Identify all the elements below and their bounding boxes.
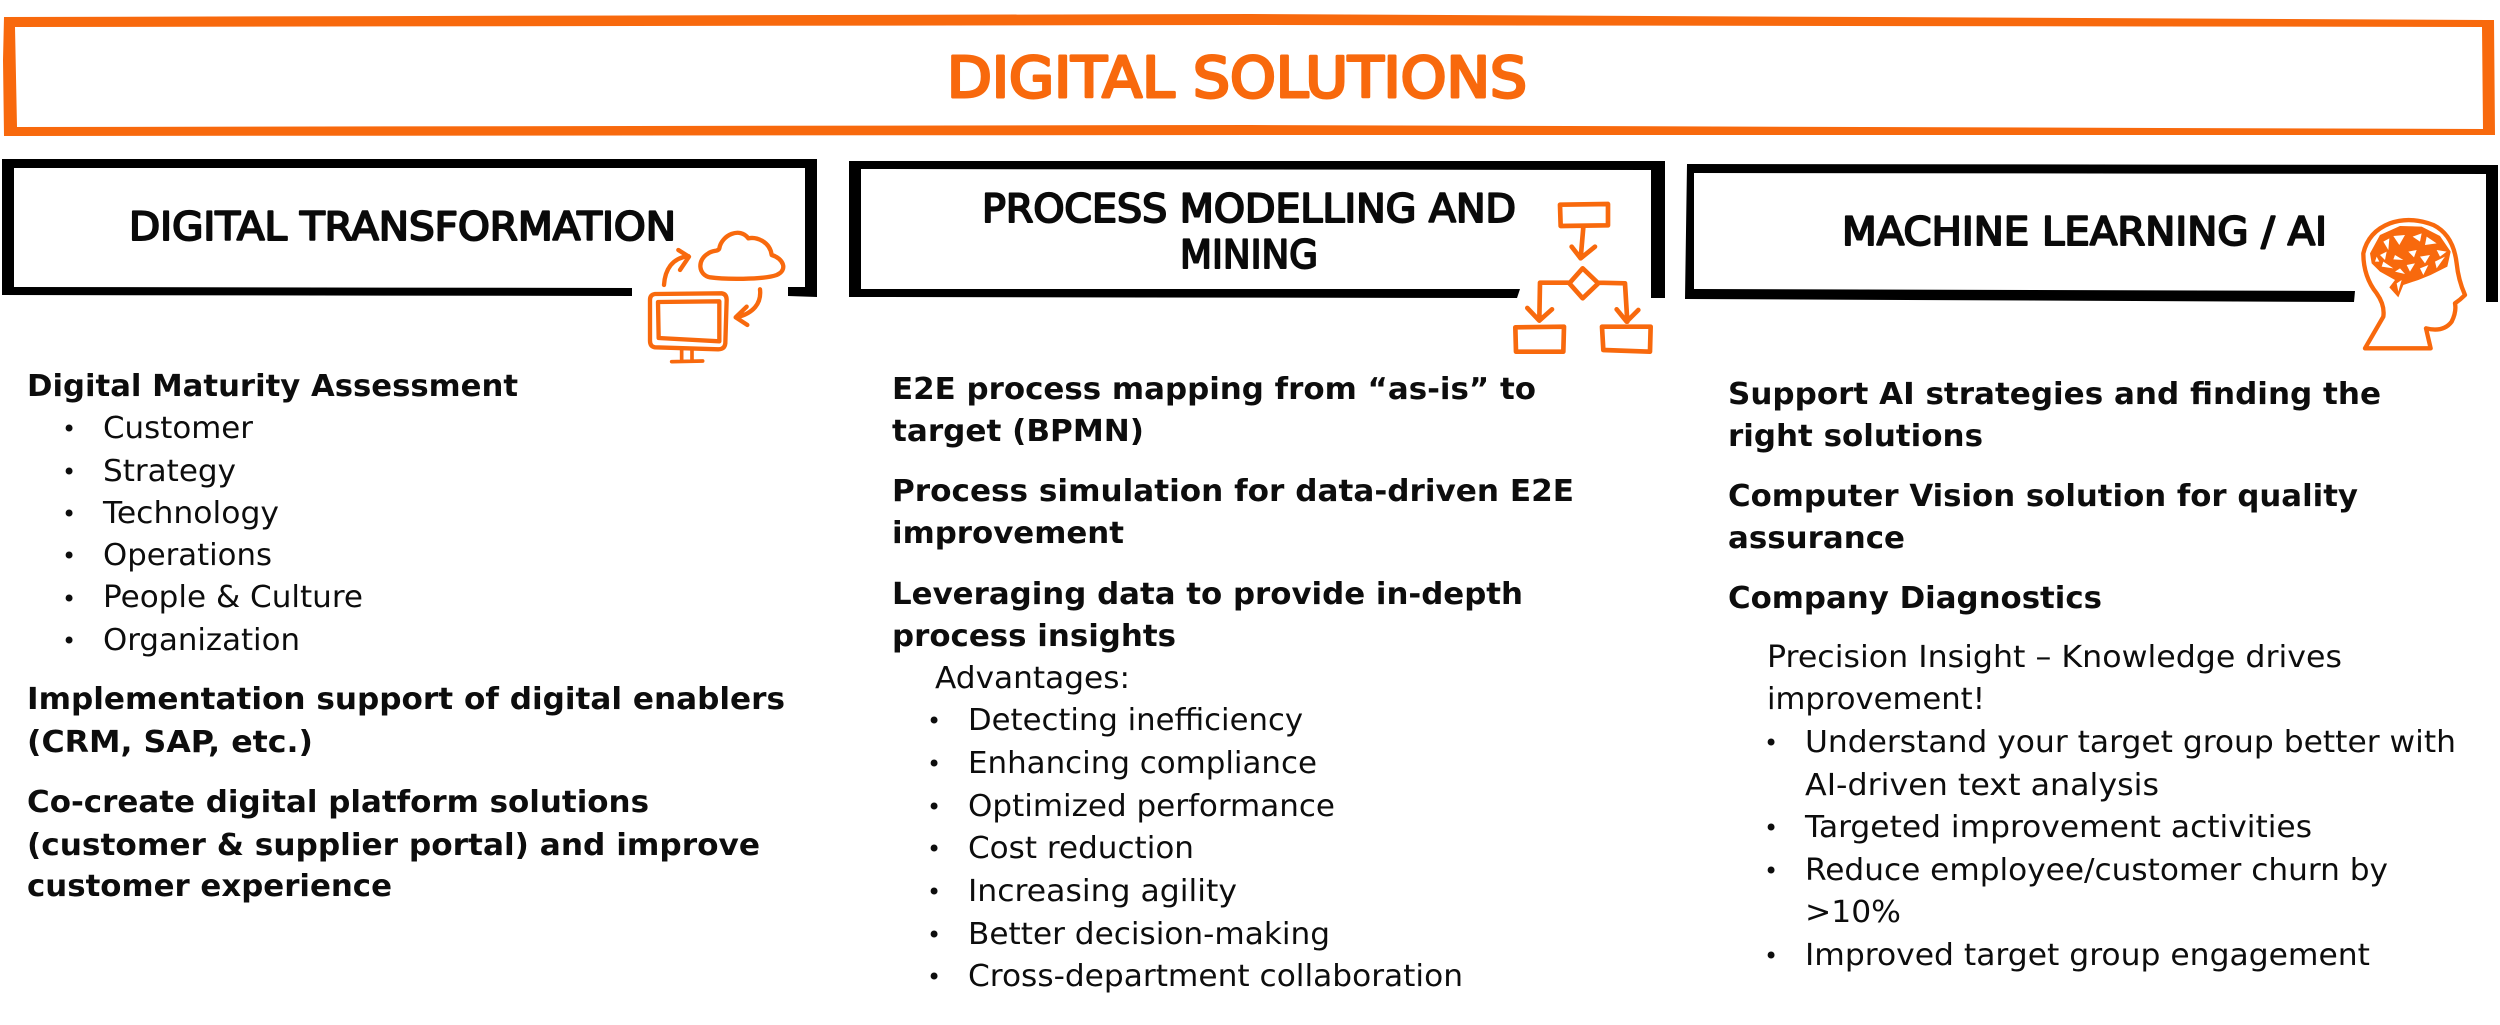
body text: process modelling: • bbox=[927, 878, 941, 906]
panel: machine learning / AI bbox=[1685, 164, 2498, 973]
body text: digital transformation: (customer & supplier portal) and improve bbox=[27, 828, 760, 863]
body text: machine learning: • bbox=[1764, 942, 1778, 970]
body text: process modelling: • bbox=[927, 921, 941, 949]
header frame bbox=[1685, 164, 2498, 302]
body text: digital transformation: Implementation support of digital enablers bbox=[27, 682, 785, 717]
title text: DIGITAL SOLUTIONS bbox=[947, 46, 1527, 111]
body text: digital transformation: Co-create digital platform solutions bbox=[27, 785, 649, 820]
body text: machine learning: Understand your target group better with bbox=[1805, 725, 2456, 760]
body text: process modelling: Better decision-making bbox=[968, 917, 1330, 952]
body text: machine learning: Computer Vision solution for quality bbox=[1728, 479, 2358, 514]
body text: process modelling: • bbox=[927, 750, 941, 778]
body text: machine learning: • bbox=[1764, 857, 1778, 885]
body text: machine learning: Precision Insight – Knowledge drives bbox=[1767, 640, 2342, 675]
body text: process modelling: Detecting inefficiency bbox=[968, 703, 1303, 738]
body text: process modelling: Cross-department collaboration bbox=[968, 959, 1463, 994]
body text: digital transformation bbox=[27, 369, 785, 904]
title frame bbox=[3, 14, 2495, 136]
header frame bbox=[849, 161, 1665, 298]
panel: process modelling and mining bbox=[849, 161, 1665, 994]
panel: process modelling and mining: MINING bbox=[1180, 233, 1318, 278]
body text: machine learning: assurance bbox=[1728, 521, 1905, 556]
body text: process modelling: Cost reduction bbox=[968, 831, 1194, 866]
icon: head with brain network bbox=[2363, 220, 2465, 348]
body text: digital transformation: Technology bbox=[102, 496, 279, 531]
header text: MACHINE LEARNING / AI bbox=[1842, 210, 2327, 255]
body text: process modelling: Advantages: bbox=[935, 661, 1130, 696]
body text: digital transformation: (CRM, SAP, etc.) bbox=[27, 725, 313, 760]
body text: digital transformation: • bbox=[62, 627, 76, 655]
body text: machine learning: improvement! bbox=[1767, 682, 1985, 717]
body text: process modelling: process insights bbox=[892, 619, 1176, 654]
icon: monitor and cloud bbox=[650, 233, 783, 362]
panel: digital transformation bbox=[2, 159, 817, 904]
body text: digital transformation: Organization bbox=[103, 623, 300, 658]
body text: machine learning: Support AI strategies and finding the bbox=[1728, 377, 2381, 412]
body text: machine learning: Reduce employee/customer churn by bbox=[1805, 853, 2388, 888]
body text: process modelling: target (BPMN) bbox=[892, 414, 1144, 449]
body text: process modelling: Process simulation for data-driven E2E bbox=[892, 474, 1574, 509]
header text: DIGITAL TRANSFORMATION bbox=[129, 205, 676, 250]
header text: PROCESS MODELLING AND bbox=[982, 187, 1516, 232]
body text: digital transformation: customer experience bbox=[27, 869, 392, 904]
body text: digital transformation: People & Culture bbox=[103, 580, 363, 615]
body text: machine learning: AI-driven text analysis bbox=[1805, 768, 2159, 803]
body text: digital transformation: • bbox=[62, 458, 76, 486]
body text: process modelling: • bbox=[927, 707, 941, 735]
body text: process modelling: Enhancing compliance bbox=[968, 746, 1317, 781]
body text: machine learning: Targeted improvement activities bbox=[1804, 810, 2312, 845]
body text: machine learning: Company Diagnostics bbox=[1728, 581, 2102, 616]
body text: machine learning bbox=[1728, 377, 2456, 973]
header frame bbox=[2, 159, 817, 297]
body text: digital transformation: Strategy bbox=[103, 454, 236, 489]
body text: process modelling bbox=[892, 372, 1574, 994]
icon: flowchart bbox=[1515, 204, 1651, 352]
body text: machine learning: • bbox=[1764, 729, 1778, 757]
body text: process modelling: Increasing agility bbox=[968, 874, 1237, 909]
body text: process modelling: E2E process mapping from “as-is” to bbox=[892, 372, 1536, 407]
body text: digital transformation: • bbox=[62, 500, 76, 528]
body text: digital transformation: • bbox=[62, 585, 76, 613]
body text: machine learning: Improved target group engagement bbox=[1805, 938, 2370, 973]
body text: digital transformation: • bbox=[62, 542, 76, 570]
body text: process modelling: Optimized performance bbox=[968, 789, 1335, 824]
body text: digital transformation: Digital Maturity Assessment bbox=[27, 369, 518, 404]
body text: digital transformation: • bbox=[62, 415, 76, 443]
body text: process modelling: Leveraging data to provide in-depth bbox=[892, 577, 1523, 612]
body text: process modelling: • bbox=[927, 793, 941, 821]
body text: process modelling: • bbox=[927, 963, 941, 991]
body text: machine learning: >10% bbox=[1805, 895, 1901, 930]
body text: digital transformation: Customer bbox=[103, 411, 254, 446]
body text: process modelling: improvement bbox=[892, 516, 1124, 551]
body text: process modelling: • bbox=[927, 835, 941, 863]
body text: machine learning: right solutions bbox=[1728, 419, 1983, 454]
title banner bbox=[3, 14, 2495, 136]
body text: machine learning: • bbox=[1764, 814, 1778, 842]
body text: digital transformation: Operations bbox=[103, 538, 272, 573]
